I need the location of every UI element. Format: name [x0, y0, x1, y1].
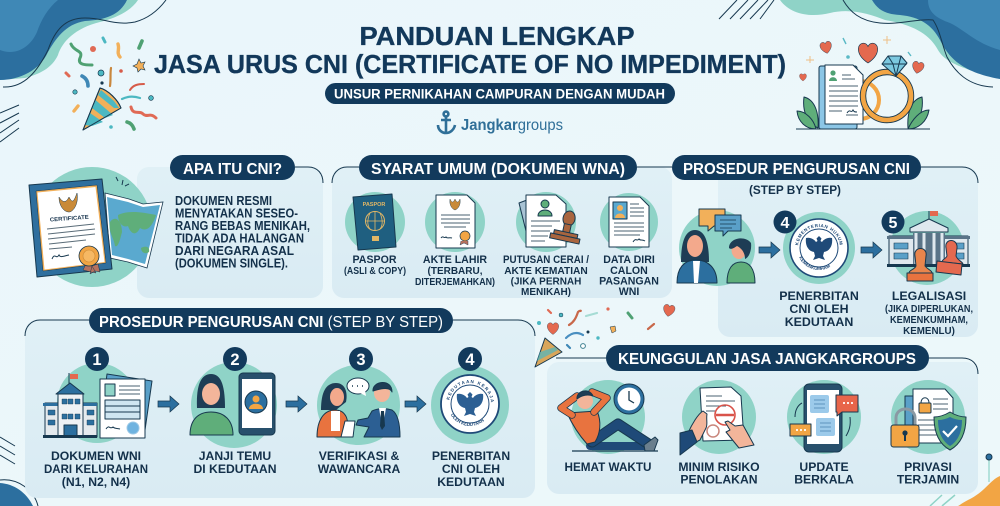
- icon: certificate and rings: [796, 36, 930, 129]
- subtitle pill: UNSUR PERNIKAHAN CAMPURAN DENGAN MUDAH: [334, 86, 665, 102]
- leaves: [797, 97, 929, 129]
- icon: padlock: [891, 409, 919, 447]
- benefit: minim risiko: MINIM RISIKO: [678, 460, 760, 474]
- icon: stamp: [550, 208, 585, 244]
- item: data diri: PASANGAN: [599, 276, 659, 288]
- panel: apa itu cni: [29, 155, 323, 298]
- icon: shield: [934, 412, 966, 450]
- icon: document: [905, 389, 953, 443]
- badge 3: 3: [356, 351, 366, 369]
- icon: interview woman: [317, 383, 355, 437]
- body text: DARI NEGARA ASAL: [175, 244, 294, 258]
- icon: seal: KEDUTAAN KERAJA: [446, 380, 494, 402]
- benefit: hemat waktu: HEMAT WAKTU: [564, 460, 652, 474]
- label: DARI KELURAHAN: [44, 462, 148, 476]
- label: legalisasi: [885, 289, 973, 337]
- heading: PROSEDUR PENGURUSAN CNI (STEP BY STEP): [99, 314, 443, 331]
- icon: documents: [100, 374, 152, 438]
- decoration: top-right blobs: [719, 0, 1000, 87]
- heading: SYARAT UMUM (DOKUMEN WNA): [371, 161, 625, 178]
- heading: [672, 155, 921, 180]
- item: putusan cerai: (JIKA PERNAH: [511, 276, 581, 288]
- badge 1: 1: [92, 351, 102, 369]
- arrow: [405, 396, 426, 412]
- icon: seal: OLEH KEDUTAAN: [451, 414, 484, 426]
- benefit: privasi terjamin: TERJAMIN: [897, 472, 959, 486]
- back ring: [841, 81, 879, 119]
- item: data diri: WNI: [619, 286, 639, 298]
- item: data diri: [599, 193, 659, 298]
- label: CNI OLEH: [442, 462, 500, 476]
- icon: seal: [783, 212, 855, 284]
- item: data diri: CALON: [610, 265, 648, 277]
- icon: world map: [105, 193, 163, 268]
- badge 5: [882, 210, 904, 234]
- front ring: [863, 72, 911, 120]
- step 4: [431, 347, 510, 489]
- item: paspor: (ASLI & COPY): [344, 266, 406, 277]
- item: akte lahir: DITERJEMAHKAN): [415, 277, 495, 288]
- decoration: second party popper: [535, 304, 676, 367]
- item: putusan cerai: AKTE KEMATIAN: [504, 266, 588, 277]
- icon: tablet: [239, 373, 275, 435]
- badge 4: [774, 210, 796, 234]
- icon: relaxing man: [561, 391, 658, 451]
- icon: seal: KEMENTERIAN HUKUM: [795, 224, 843, 246]
- stamps: [909, 248, 932, 273]
- label: PENERBITAN: [432, 449, 510, 463]
- heading: [606, 345, 929, 371]
- item: paspor: [344, 192, 406, 277]
- step 1: [43, 347, 152, 489]
- logo: Jangkargroups: Jangkargroups: [461, 117, 563, 134]
- document: [819, 66, 857, 129]
- icon: certificate: CERTIFICATE: [50, 215, 89, 223]
- item: data diri: DATA DIRI: [603, 254, 655, 266]
- badge 4: 4: [465, 351, 475, 369]
- badge 4: 4: [781, 215, 790, 232]
- icon: consultation: [677, 209, 755, 286]
- icon: smartphone: [804, 384, 842, 452]
- benefit: update berkala: [787, 380, 861, 486]
- benefit: update berkala: UPDATE: [799, 460, 849, 474]
- benefit: update berkala: BERKALA: [794, 472, 854, 486]
- title: [154, 23, 786, 79]
- heading: KEUNGGULAN JASA JANGKARGROUPS: [618, 351, 916, 368]
- label: KEDUTAAN: [437, 475, 505, 489]
- item: akte lahir: (TERBARU,: [428, 266, 483, 277]
- label: DI KEDUTAAN: [193, 462, 277, 476]
- icon: seal: [440, 374, 500, 434]
- icon: party popper: [66, 38, 156, 130]
- icon: government building with stamps: [887, 211, 970, 285]
- item: putusan cerai: PUTUSAN CERAI /: [503, 254, 589, 266]
- body text: MENYATAKAN SESEO-: [175, 206, 298, 220]
- decoration: bottom-left blob: [0, 437, 38, 506]
- step 3: [317, 347, 400, 476]
- icon: speech bubble: [347, 378, 369, 396]
- body text: (DOKUMEN SINGLE).: [175, 256, 288, 270]
- label: JANJI TEMU: [199, 449, 271, 463]
- icon: stamped document: [700, 387, 744, 441]
- heading: [170, 155, 295, 180]
- icon: hands: [680, 411, 754, 455]
- heading: PROSEDUR PENGURUSAN CNI: [683, 161, 910, 178]
- heading: [359, 155, 637, 180]
- badge 5: 5: [889, 215, 898, 232]
- item: akte lahir: [415, 192, 495, 288]
- label: legalisasi: KEMENKUMHAM,: [890, 315, 968, 326]
- panel: prosedur pengurusan cni (top right): [650, 155, 978, 337]
- body text: DOKUMEN RESMI: [175, 194, 272, 208]
- arrow: [759, 242, 780, 258]
- confetti streamers: [66, 38, 156, 129]
- label: legalisasi: (JIKA DIPERLUKAN,: [885, 304, 973, 315]
- label: penerbitan: CNI OLEH: [789, 302, 849, 316]
- icon: certificate: [29, 179, 112, 277]
- hearts: [858, 43, 878, 63]
- arrow: [158, 396, 179, 412]
- subtitle pill: [325, 83, 675, 104]
- badge 2: 2: [230, 351, 240, 369]
- icon: clock: [614, 384, 644, 414]
- icon: seal: KEMENKUMHAM: [799, 256, 830, 270]
- arrow: [861, 242, 882, 258]
- icon: chat bubbles: [790, 395, 858, 436]
- icon: interview man: [356, 382, 400, 437]
- icon: woman: [190, 374, 233, 435]
- label: [44, 449, 148, 489]
- item: paspor: PASPOR: [363, 202, 385, 208]
- label: penerbitan: KEDUTAAN: [785, 315, 853, 329]
- item: putusan cerai: MENIKAH): [521, 287, 571, 298]
- arrow: [286, 396, 307, 412]
- item: paspor: PASPOR: [353, 254, 397, 266]
- subheading: (STEP BY STEP): [749, 183, 841, 197]
- badge 1: [85, 347, 109, 371]
- benefit: minim risiko: PENOLAKAN: [680, 472, 758, 486]
- logo: Jangkargroups: [438, 112, 563, 134]
- benefit: privasi terjamin: PRIVASI: [904, 460, 952, 474]
- label: [432, 449, 510, 489]
- heading: APA ITU CNI?: [183, 161, 282, 178]
- icon: kelurahan building: [43, 373, 97, 438]
- decoration: top-left blobs: [0, 0, 166, 142]
- panel: prosedur step by step: [24, 308, 536, 498]
- icon: anchor: [438, 112, 455, 133]
- label: WAWANCARA: [318, 462, 400, 476]
- body text: RANG BEBAS MENIKAH,: [175, 219, 310, 233]
- benefit: hemat waktu: [561, 380, 658, 474]
- badge 4: [458, 347, 482, 371]
- benefit: minim risiko: [678, 380, 760, 486]
- label: DOKUMEN WNI: [51, 449, 141, 463]
- label: [193, 449, 277, 476]
- step 2: [190, 347, 277, 476]
- label: legalisasi: KEMENLU): [903, 326, 955, 337]
- title: JASA URUS CNI (CERTIFICATE OF NO IMPEDIMENT): [154, 51, 786, 79]
- body text: [175, 194, 310, 270]
- heading: [89, 308, 453, 333]
- label: (N1, N2, N4): [62, 475, 130, 489]
- panel: keunggulan: [547, 345, 978, 494]
- item: putusan cerai: [503, 192, 589, 298]
- body text: TIDAK ADA HALANGAN: [175, 232, 304, 246]
- label: VERIFIKASI &: [319, 449, 399, 463]
- icon: teal circle: [32, 167, 152, 287]
- label: [318, 449, 400, 476]
- panel: syarat umum: [332, 155, 672, 298]
- label: penerbitan: [779, 289, 859, 329]
- label: penerbitan: PENERBITAN: [779, 289, 859, 303]
- benefit: privasi terjamin: [891, 380, 966, 486]
- label: legalisasi: LEGALISASI: [892, 289, 966, 303]
- decoration: bottom-right blob: [930, 454, 1000, 506]
- item: akte lahir: AKTE LAHIR: [423, 254, 487, 266]
- title: PANDUAN LENGKAP: [360, 23, 634, 51]
